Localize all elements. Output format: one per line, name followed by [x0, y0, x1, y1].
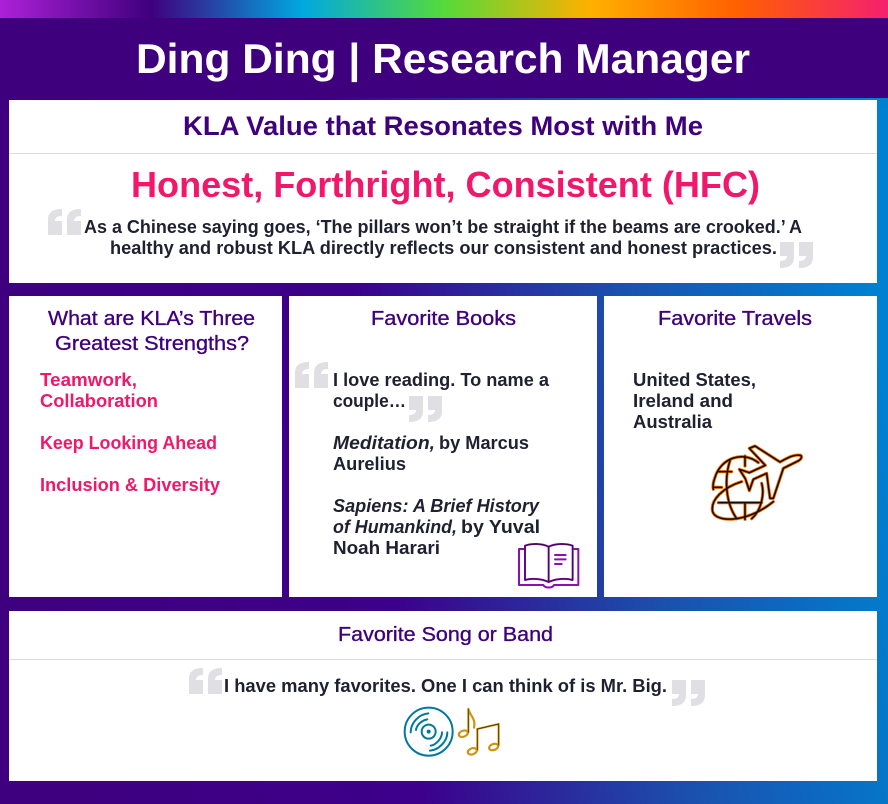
books text: I love reading. To name a — [333, 369, 550, 390]
travels text: United States, — [633, 369, 756, 390]
heading: KLA value: KLA Value that Resonates Most with Me — [183, 111, 703, 141]
books text: by Yuval — [461, 516, 540, 537]
rainbow bar — [0, 0, 888, 18]
books text: Sapiens: A Brief History — [333, 495, 541, 516]
value name: Honest, Forthright, Consistent (HFC) — [131, 164, 760, 205]
panel: favorite song or band — [9, 611, 877, 781]
icon: music notes — [458, 709, 499, 756]
books text: couple… — [333, 390, 406, 411]
icon: opening quote — [295, 362, 328, 388]
heading: travels: Favorite Travels — [658, 308, 812, 330]
strengths list: Teamwork, — [40, 369, 137, 390]
panel: KLA value — [9, 100, 877, 283]
icon: vinyl disc — [405, 708, 453, 756]
strengths list: Keep Looking Ahead — [40, 432, 217, 453]
strengths list: Inclusion & Diversity — [40, 474, 221, 495]
icon: closing quote — [672, 680, 705, 706]
heading: books: Favorite Books — [371, 308, 516, 330]
heading: song: Favorite Song or Band — [338, 624, 553, 646]
books text: Aurelius — [333, 453, 406, 474]
panel: travels — [604, 296, 877, 597]
books text: Meditation, — [333, 432, 435, 453]
icon: globe and plane — [712, 446, 801, 519]
travels text: Ireland and — [633, 390, 733, 411]
books text: by Marcus — [439, 432, 529, 453]
icon: closing quote — [780, 242, 813, 268]
heading: strengths: What are KLA’s Three — [48, 308, 255, 330]
icon: opening quote — [48, 209, 81, 235]
books text: of Humankind, — [333, 516, 457, 537]
panel: books — [289, 296, 597, 597]
icon: open book — [519, 544, 578, 587]
heading: strengths — [48, 308, 255, 355]
books text: Noah Harari — [333, 537, 440, 558]
title: Ding Ding | Research Manager — [136, 35, 750, 83]
strengths list: Collaboration — [40, 390, 158, 411]
travels text: Australia — [633, 411, 713, 432]
travels text — [633, 369, 756, 432]
quote text: As a Chinese saying goes, ‘The pillars won’t be straight if the beams are crooked.’ A — [84, 216, 802, 237]
icon: opening quote — [189, 668, 222, 694]
icon: closing quote — [409, 396, 442, 422]
panel: strengths — [9, 296, 282, 597]
quote text: healthy and robust KLA directly reflects our consistent and honest practices. — [110, 237, 777, 258]
song text: I have many favorites. One I can think of is Mr. Big. — [224, 675, 667, 696]
strengths list — [40, 369, 221, 495]
header band — [0, 18, 888, 98]
quote text — [84, 216, 802, 258]
heading: strengths: Greatest Strengths? — [55, 333, 249, 355]
books text — [333, 369, 550, 558]
